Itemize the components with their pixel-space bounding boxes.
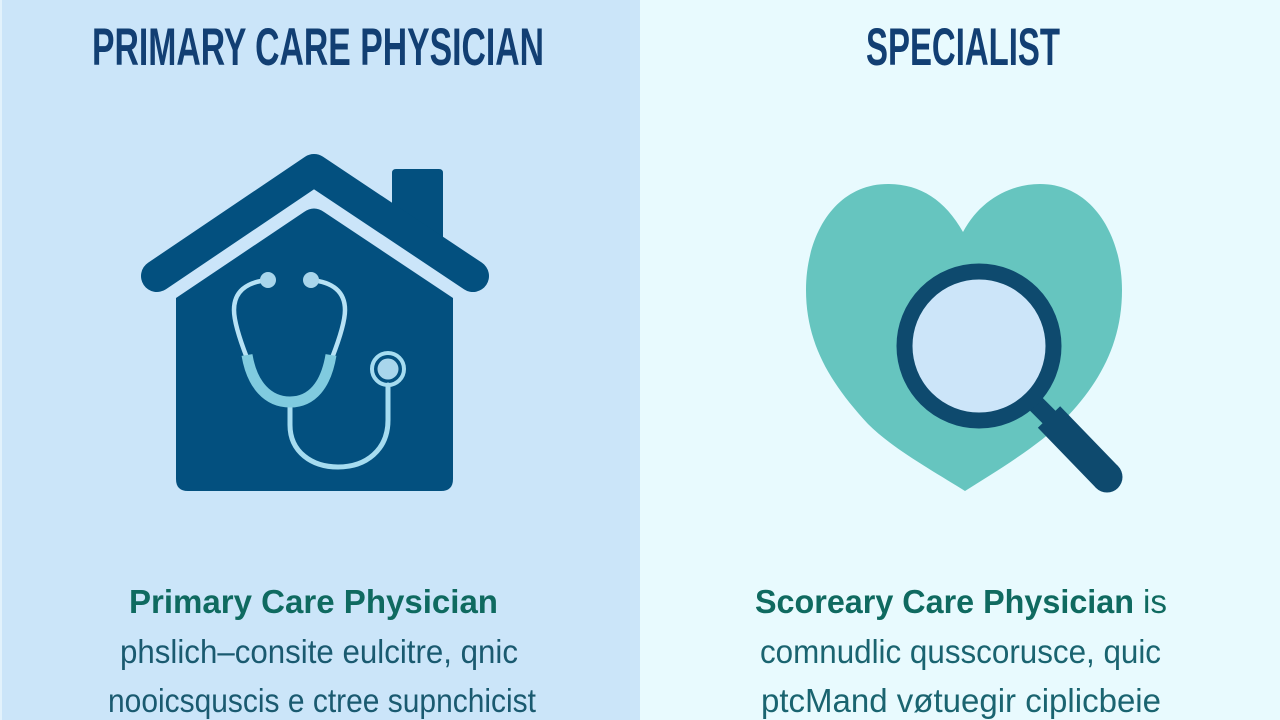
body text: specialist: ptcMand vøtuegir ciplicbeie [761, 682, 1161, 719]
chimney [392, 169, 443, 250]
heading: primary care physician: PRIMARY CARE PHYSICIAN [92, 18, 544, 77]
body text: primary care [108, 633, 536, 719]
body text: primary care: nooicsquscis e ctree supnchicist [108, 682, 536, 719]
magnifying glass [904, 272, 1122, 492]
heading: specialist: SPECIALIST [866, 18, 1060, 77]
stethoscope [234, 272, 404, 467]
heart [806, 184, 1122, 491]
subheading: primary care physician: Primary Care Physician [129, 583, 498, 620]
icon: heart with magnifying glass [806, 184, 1122, 492]
icon: house with stethoscope [157, 169, 473, 491]
body text: primary care: phslich–consite eulcitre, qnic [120, 633, 518, 670]
subheading: specialist: Scoreary Care Physician [755, 583, 1134, 620]
subheading: specialist: is [1143, 583, 1167, 620]
roof [157, 170, 473, 276]
house body [176, 208, 453, 491]
body text: specialist [760, 633, 1161, 719]
panel: specialist [640, 0, 1280, 720]
body text: specialist: comnudlic qusscorusce, quic [760, 633, 1161, 670]
panel: primary care physician [0, 0, 640, 720]
